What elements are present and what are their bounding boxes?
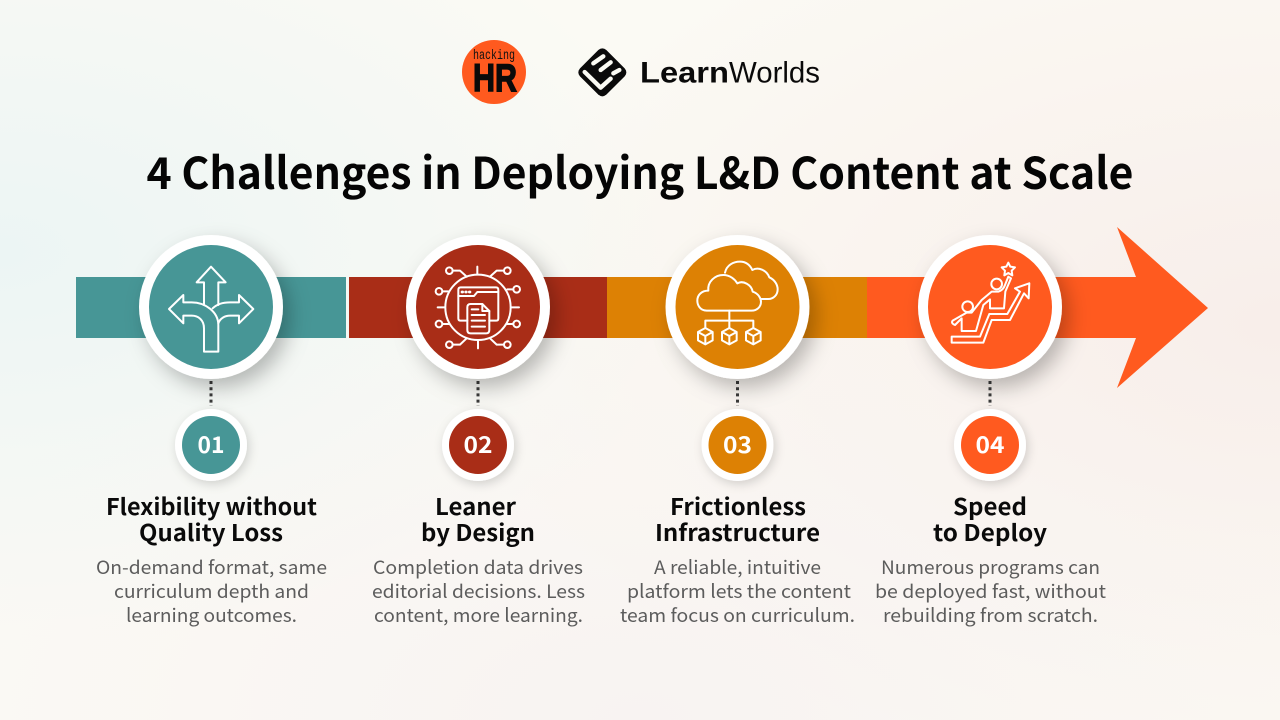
description: A reliable, intuitive [654,554,821,580]
logo: Hacking HR: HR [473,57,517,100]
heading [106,488,317,548]
wordmark: Learn [640,56,729,90]
dotted connectors [211,381,990,406]
heading [933,488,1047,548]
icon: people climbing stairs [918,235,1062,379]
description: platform lets the content [627,578,851,604]
step 2: leaner [372,235,585,628]
heading: Speed [953,488,1027,522]
heading: by Design [421,514,535,548]
description [96,554,327,628]
icon: diverging arrows [139,235,283,379]
step 4: speed [875,235,1106,628]
number badge 02: 02 [464,426,492,460]
heading: Flexibility without [106,488,317,522]
description: learning outcomes. [126,602,297,628]
logo: Hacking HR: hacking [473,49,515,64]
timeline arrow bar [76,227,1208,388]
logo: LearnWorlds [578,48,820,96]
heading [421,488,535,548]
number badge 01 [175,409,247,481]
logo mark [578,48,626,96]
description: On-demand format, same [96,554,327,580]
description: Completion data drives [373,554,583,580]
description: content, more learning. [374,602,583,628]
number badge 02 [442,409,514,481]
heading: Leaner [435,488,517,522]
icon: cloud network [666,235,810,379]
heading: to Deploy [933,514,1047,548]
logo: LearnWorlds: Worlds [729,56,820,90]
heading: Quality Loss [139,514,283,548]
description: rebuilding from scratch. [883,602,1098,628]
logo: Hacking HR [462,40,526,104]
description: editorial decisions. Less [372,578,585,604]
title: 4 Challenges in Deploying L&D Content at Scale [146,138,1134,202]
description: team focus on curriculum. [620,602,855,628]
number badge 01: 01 [198,426,224,460]
heading: Infrastructure [655,514,820,548]
number badge 03: 03 [723,426,752,460]
number badge 04 [954,409,1026,481]
description [875,554,1106,628]
heading [655,488,820,548]
description [620,554,855,628]
number badge 03 [702,409,774,481]
number badge 04: 04 [976,426,1004,460]
icon: web document network [406,235,550,379]
description: curriculum depth and [114,578,309,604]
step 1: flexibility [96,235,327,628]
step 3: frictionless [620,235,855,628]
description: Numerous programs can [881,554,1100,580]
heading: Frictionless [670,488,806,522]
description: be deployed fast, without [875,578,1106,604]
description [372,554,585,628]
